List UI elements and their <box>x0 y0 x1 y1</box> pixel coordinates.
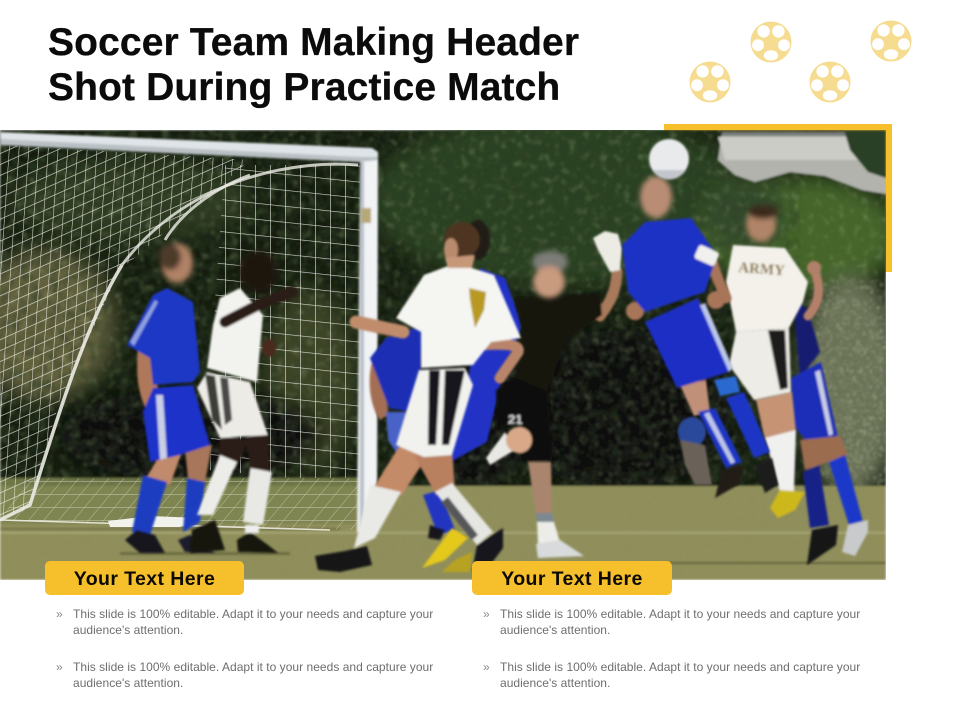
tree top right <box>844 130 886 178</box>
player: blue behind number 5 <box>370 325 455 540</box>
player: goalkeeper in black: 21 <box>508 412 522 427</box>
decorative soccer balls <box>690 20 912 102</box>
player: white army jersey <box>726 245 821 518</box>
text block: left bullet 1: This slide is 100% editable. Adapt it to your needs and capture your <box>73 606 433 620</box>
text block: left bullet 2: This slide is 100% editable. Adapt it to your needs and capture your <box>73 660 433 674</box>
text block: right bullet 1 <box>483 606 860 636</box>
blurred head: jumping player <box>640 176 672 218</box>
label: left column heading: Your Text Here <box>74 568 215 590</box>
label: right column heading <box>472 561 672 595</box>
icon: ball 1 <box>750 22 792 62</box>
soccer ball in play <box>649 139 689 179</box>
yellow boots <box>422 528 468 568</box>
text block: left bullet 1 <box>56 606 434 636</box>
text block: left bullet 2: » <box>56 660 63 674</box>
text block: left bullet 2: audience's attention. <box>73 676 183 690</box>
goal frame <box>0 132 378 532</box>
photo: soccer players heading the ball in front of the goal <box>0 130 886 580</box>
title: Shot During Practice Match <box>48 66 560 108</box>
icon: ball 3 <box>690 62 730 102</box>
blurred head: army player <box>746 205 778 242</box>
text block: right bullet 2 <box>483 660 860 690</box>
text block: right bullet 2: audience's attention. <box>500 676 610 690</box>
yellow corner frame <box>664 124 892 272</box>
title <box>48 20 579 108</box>
player: white army jersey: ARMY <box>738 260 786 279</box>
text block: right bullet 1: » <box>483 606 490 620</box>
text block: right bullet 2: » <box>483 660 490 674</box>
blurred head: goalkeeper <box>532 251 568 298</box>
player: white number 5 <box>315 222 521 572</box>
mid green foliage <box>370 115 750 285</box>
player: blue back right <box>791 298 868 565</box>
text block: right bullet 1: This slide is 100% editable. Adapt it to your needs and capture your <box>500 606 860 620</box>
blurred head: white player <box>239 251 277 293</box>
grass <box>0 486 886 580</box>
spectators <box>678 417 712 485</box>
grey building <box>718 133 886 194</box>
player: jumping blue heading the ball <box>622 218 778 498</box>
text block: right bullet 1: audience's attention. <box>500 622 610 636</box>
text block: left bullet 2 <box>56 660 434 690</box>
background foliage and grass <box>0 115 900 580</box>
text block: right bullet 2: This slide is 100% editable. Adapt it to your needs and capture your <box>500 660 860 674</box>
label: left column heading <box>45 561 244 595</box>
player: blue middle <box>445 220 522 465</box>
text block: left bullet 1: » <box>56 606 63 620</box>
text block: left bullet 1: audience's attention. <box>73 622 183 636</box>
blurred head: player 3 <box>159 243 193 283</box>
icon: ball 2 <box>870 20 912 62</box>
player: blue number 3 <box>125 288 215 553</box>
player: white in front of net <box>190 288 292 553</box>
player: goalkeeper in black <box>486 231 622 558</box>
goal net <box>0 145 360 530</box>
title: Soccer Team Making Header <box>48 20 579 64</box>
icon: ball 4 <box>810 62 850 102</box>
label: right column heading: Your Text Here <box>501 568 643 590</box>
